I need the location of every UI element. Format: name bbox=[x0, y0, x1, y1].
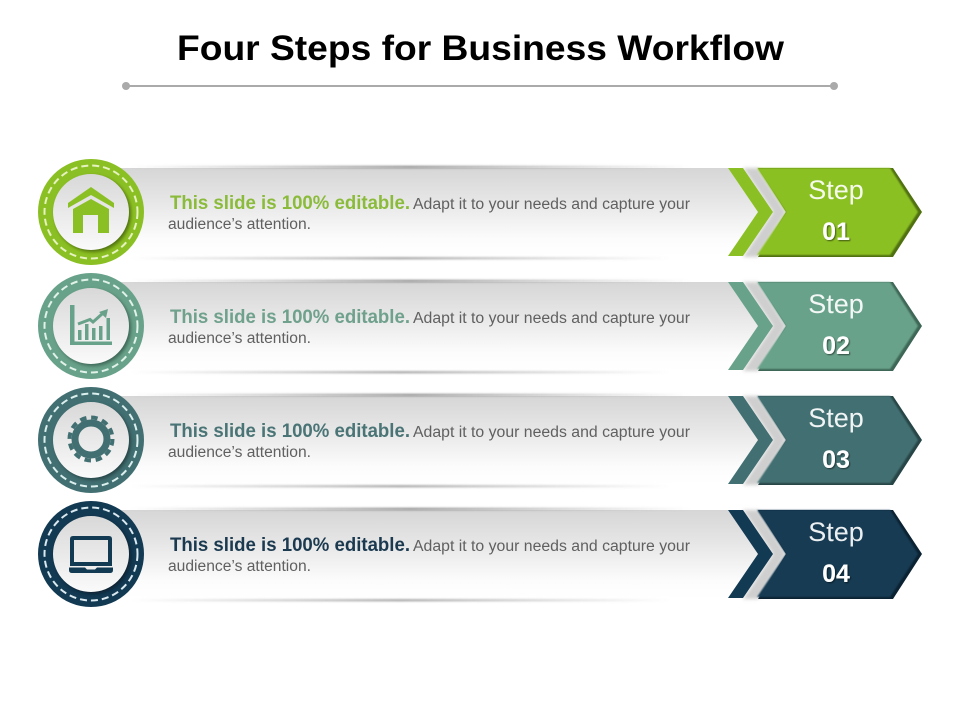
panel: step 04 bbox=[38, 501, 922, 607]
icon: laptop bbox=[69, 536, 113, 573]
description text: Adapt it to your needs and capture your bbox=[413, 310, 690, 327]
description text: This slide is 100% editable. bbox=[170, 420, 410, 442]
description text: Adapt it to your needs and capture your bbox=[413, 424, 690, 441]
step arrow: Step bbox=[808, 517, 864, 547]
description text: This slide is 100% editable. bbox=[170, 306, 410, 328]
circle badge with gear icon bbox=[38, 387, 144, 493]
chevron arrow bbox=[728, 282, 786, 371]
description text bbox=[168, 534, 690, 575]
step arrow bbox=[757, 168, 922, 257]
icon: house bbox=[68, 187, 114, 233]
step arrow: Step bbox=[808, 289, 864, 319]
description text: audience’s attention. bbox=[168, 330, 311, 347]
panel: step 02 bbox=[38, 273, 922, 379]
circle badge with chart icon bbox=[38, 273, 144, 379]
panel: step 03 bbox=[38, 387, 922, 493]
chevron arrow bbox=[728, 168, 786, 257]
icon: gear bbox=[70, 418, 112, 460]
step arrow bbox=[757, 396, 922, 485]
text band bbox=[90, 508, 758, 601]
description text bbox=[168, 306, 690, 347]
step arrow bbox=[757, 282, 922, 371]
description text: This slide is 100% editable. bbox=[170, 534, 410, 556]
panel: step 01 bbox=[38, 159, 922, 265]
description text bbox=[168, 420, 690, 461]
description text: audience’s attention. bbox=[168, 444, 311, 461]
circle badge with laptop icon bbox=[38, 501, 144, 607]
title: Four Steps for Business Workflow bbox=[177, 29, 785, 68]
description text: Adapt it to your needs and capture your bbox=[413, 196, 690, 213]
text band bbox=[90, 394, 758, 487]
step arrow bbox=[757, 510, 922, 599]
description text: This slide is 100% editable. bbox=[170, 192, 410, 214]
icon: growth chart bbox=[70, 305, 112, 345]
description text: Adapt it to your needs and capture your bbox=[413, 538, 690, 555]
description text bbox=[168, 192, 690, 233]
step arrow: 03 bbox=[822, 446, 850, 474]
description text: audience’s attention. bbox=[168, 216, 311, 233]
step arrow: 04 bbox=[822, 560, 850, 588]
text band bbox=[90, 280, 758, 373]
text band bbox=[90, 166, 758, 259]
title divider with end dots bbox=[122, 82, 838, 90]
step arrow: Step bbox=[808, 403, 864, 433]
step arrow: 01 bbox=[822, 218, 850, 246]
chevron arrow bbox=[728, 510, 786, 599]
description text: audience’s attention. bbox=[168, 558, 311, 575]
step arrow: Step bbox=[808, 175, 864, 205]
circle badge with house icon bbox=[38, 159, 144, 265]
step arrow: 02 bbox=[822, 332, 850, 360]
chevron arrow bbox=[728, 396, 786, 485]
